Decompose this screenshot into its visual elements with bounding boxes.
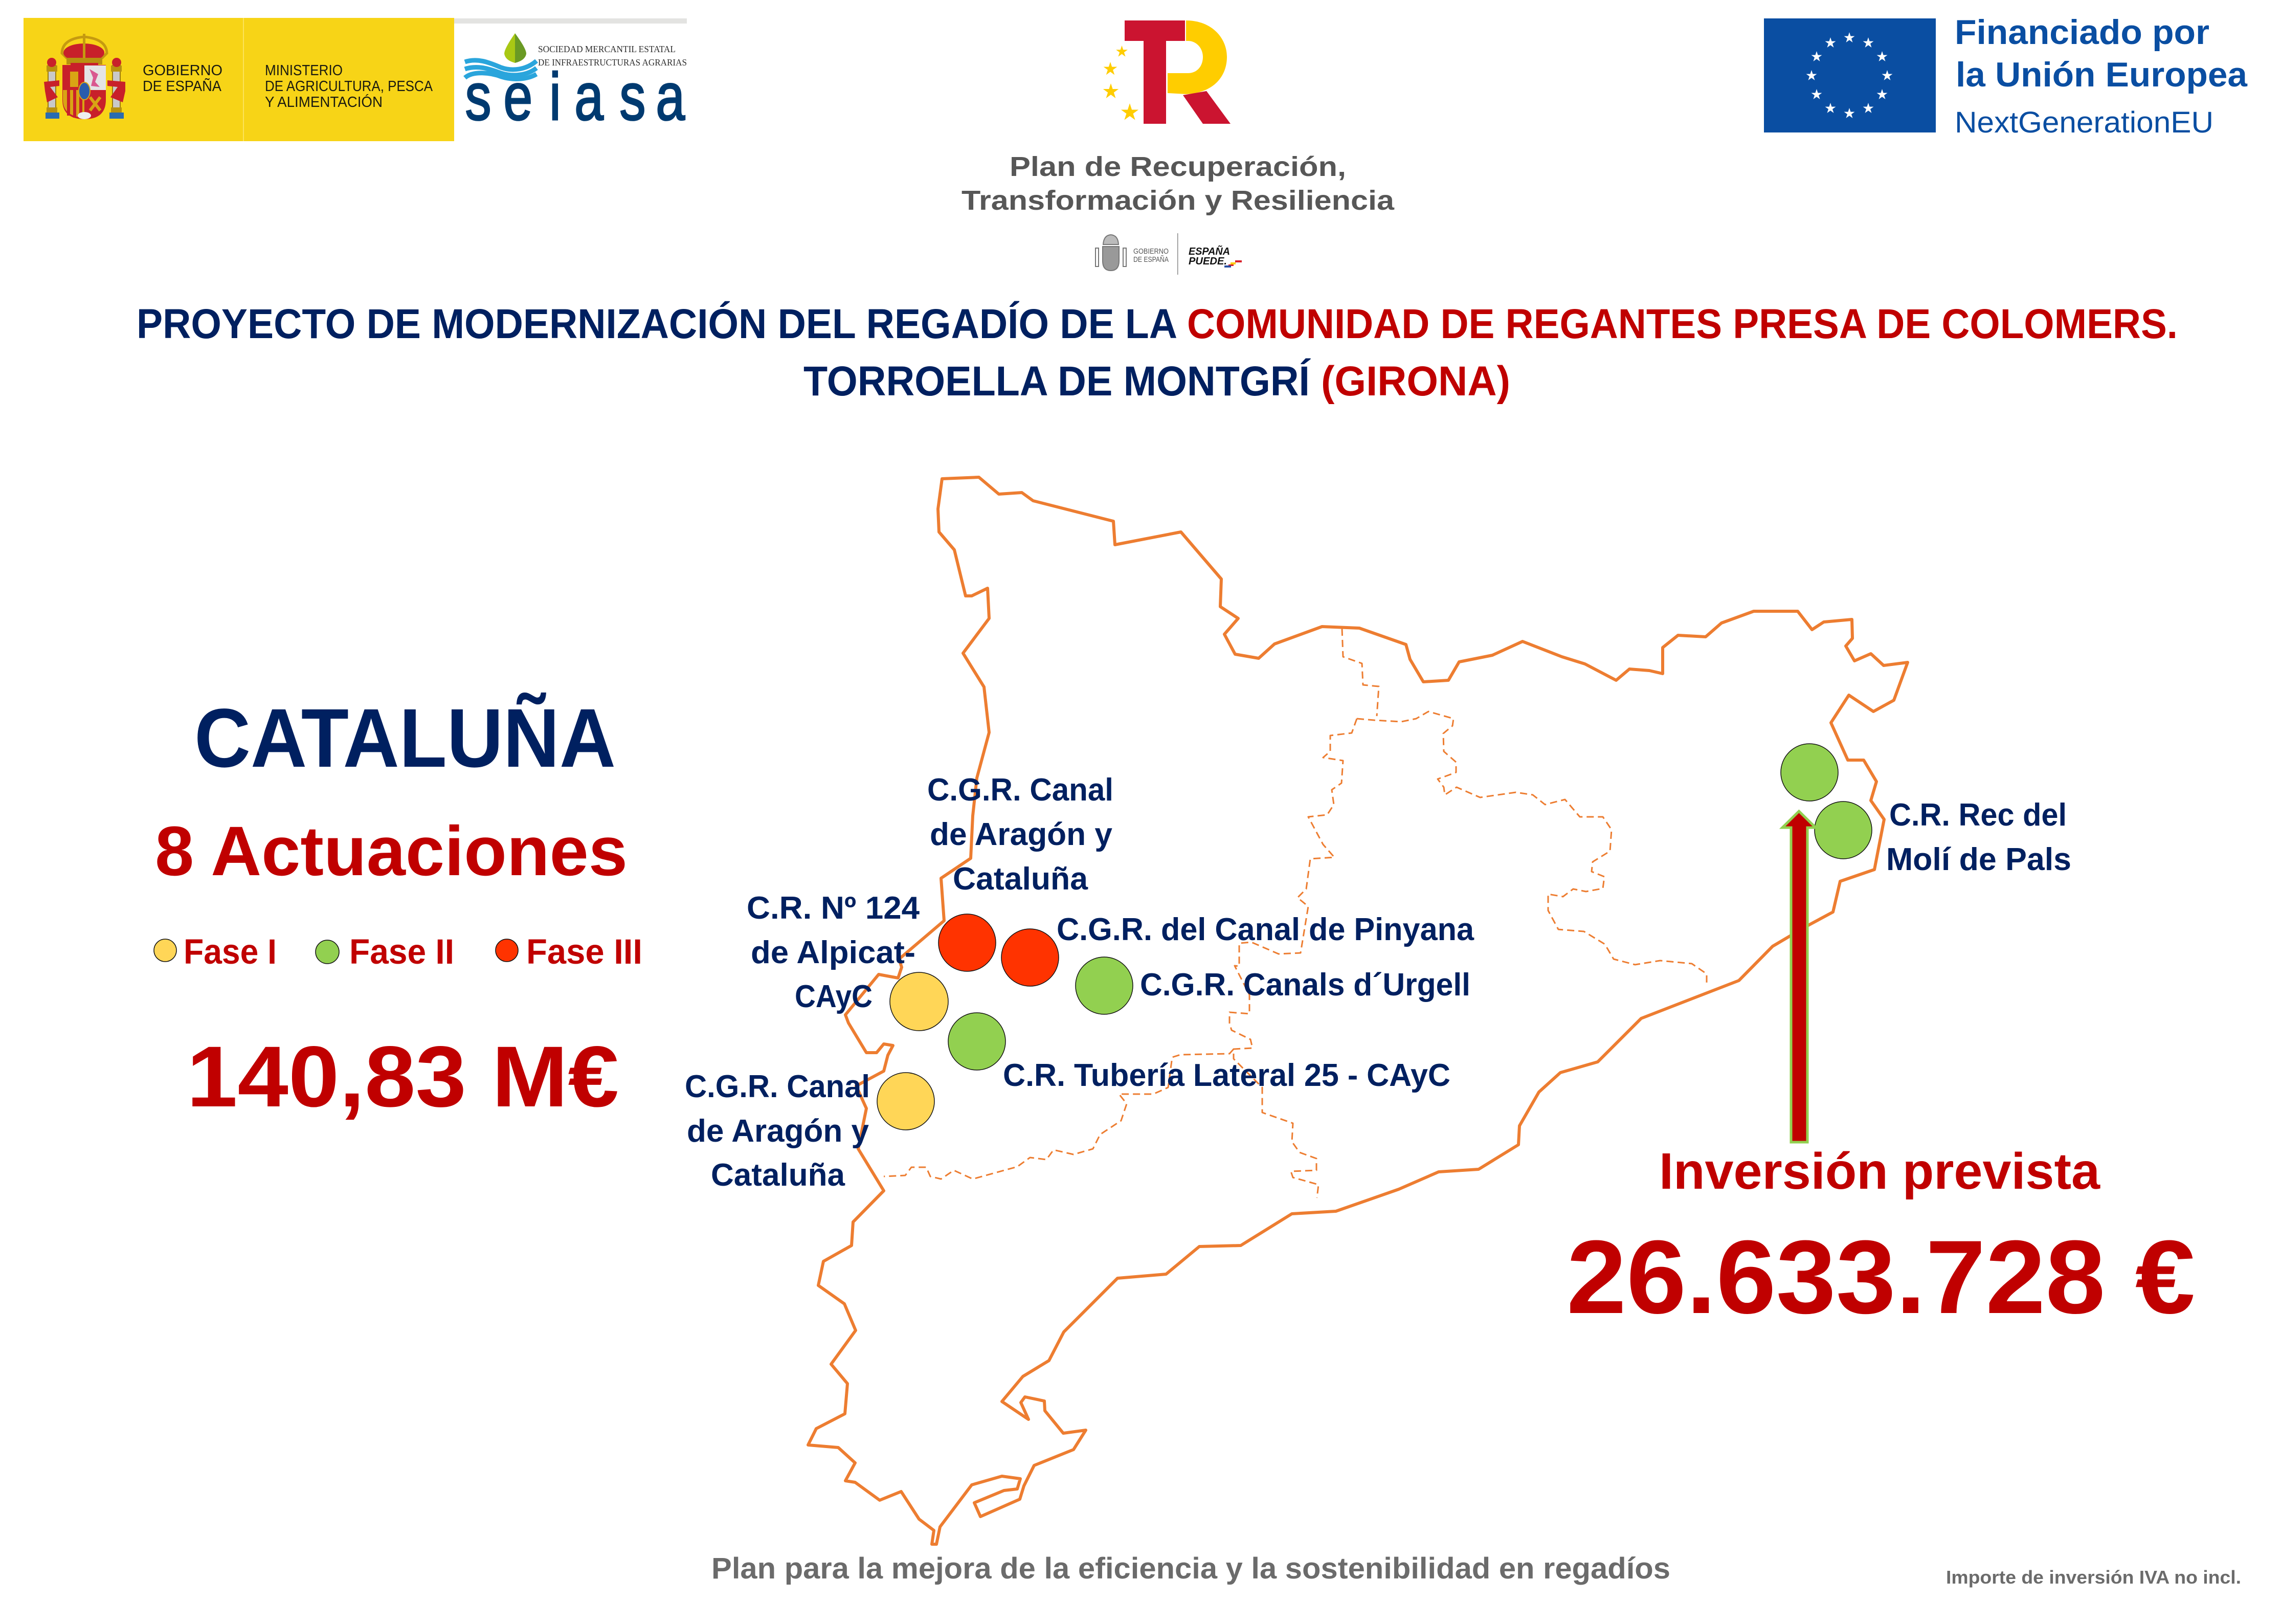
logo: Financiado por la Unión Europea [1764, 13, 2248, 139]
marker: C.G.R. Canals d'Urgell, fase II [1076, 957, 1133, 1014]
logo: Plan de Recuperación, Transformación y Resiliencia [961, 20, 1395, 275]
marker: project site north [1781, 744, 1838, 801]
title: (GIRONA) [1321, 358, 1510, 405]
legend: Fase I [184, 932, 277, 971]
label: C.G.R. Canal de Aragón y Cataluña (south): C.G.R. Canal [685, 1069, 870, 1104]
text: NextGenerationEU: NextGenerationEU [1955, 106, 2213, 139]
title: COMUNIDAD DE REGANTES PRESA DE COLOMERS. [1187, 301, 2178, 347]
label: C.R. Nº 124 de Alpicat-CAyC [747, 891, 920, 1014]
icon: coat of arms of Spain [44, 34, 125, 119]
text: Sociedad Mercantil Estatal de Infraestructuras Agrarias: SOCIEDAD MERCANTIL ESTATAL [538, 44, 676, 54]
icon: water waves [465, 60, 536, 79]
text: España Puede: PUEDE. [1189, 256, 1227, 267]
label: C.R. Nº 124 de Alpicat-CAyC: CAyC [795, 979, 873, 1014]
title: TORROELLA DE MONTGRÍ [803, 358, 1311, 405]
text: small Gobierno de España [1133, 247, 1169, 264]
text: Ministerio de Agricultura, Pesca y Alimentación [265, 62, 433, 110]
text: Financiado por: Financiado por [1955, 13, 2209, 52]
text: España Puede: ESPAÑA [1189, 246, 1230, 257]
title [137, 301, 2178, 405]
label: C.G.R. Canal de Aragón y Cataluña (north): C.G.R. Canal [927, 772, 1113, 808]
heading: Cataluña: CATALUÑA [194, 691, 616, 785]
label: C.R. Nº 124 de Alpicat-CAyC: de Alpicat- [751, 935, 915, 970]
left panel: summary [154, 691, 642, 1125]
text: 8 Actuaciones: 8 Actuaciones [155, 812, 628, 891]
text: small Gobierno de España: GOBIERNO [1133, 247, 1169, 256]
callout: planned investment [1567, 1143, 2195, 1336]
region outline [808, 477, 1908, 1544]
logo: SEIASA [454, 18, 687, 134]
label: C.R. Rec del Molí de Pals: Molí de Pals [1886, 842, 2071, 877]
text: Ministerio de Agricultura, Pesca y Alimentación: DE AGRICULTURA, PESCA [265, 78, 433, 95]
label: C.G.R. Canal de Aragón y Cataluña (north): de Aragón y [930, 817, 1113, 852]
label: C.G.R. Canal de Aragón y Cataluña (north) [927, 772, 1113, 897]
label: C.G.R. Canal de Aragón y Cataluña (south): Cataluña [711, 1158, 845, 1193]
marker: C.G.R. Canal de Aragón y Cataluña, fase III [938, 914, 996, 971]
logo: Gobierno de España, Ministerio [24, 18, 454, 141]
label: C.R. Nº 124 de Alpicat-CAyC: C.R. Nº 124 [747, 891, 920, 926]
marker: C.R. Nº 124 de Alpicat, fase I [890, 972, 948, 1031]
arrow [1782, 811, 1816, 1142]
icon: EU flag [1764, 18, 1936, 132]
label: C.G.R. Canal de Aragón y Cataluña (north): Cataluña [953, 861, 1088, 897]
title: PROYECTO DE MODERNIZACIÓN DEL REGADÍO DE LA [137, 301, 1177, 347]
legend: Fase II [349, 932, 454, 971]
marker: C.R. Rec del Molí de Pals, fase II [1815, 802, 1872, 859]
text: Ministerio de Agricultura, Pesca y Alimentación: Y ALIMENTACIÓN [265, 94, 383, 110]
map of Cataluña [808, 477, 1908, 1544]
text: Ministerio de Agricultura, Pesca y Alimentación: MINISTERIO [265, 62, 343, 79]
marker: C.G.R. del Canal de Pinyana, fase III [1001, 929, 1059, 986]
text: Inversión prevista: Inversión prevista [1659, 1143, 2100, 1200]
text: investment amount: 26.633.728 € [1567, 1219, 2195, 1336]
map markers [877, 744, 1872, 1130]
legend: Fase III [526, 932, 642, 971]
text: seiasa wordmark: seiasa [465, 59, 685, 134]
text: Gobierno de España [143, 62, 222, 95]
text: España Puede [1189, 246, 1230, 267]
text: small Gobierno de España: DE ESPAÑA [1133, 255, 1169, 264]
label: C.R. Tubería Lateral 25 - CAyC: C.R. Tubería Lateral 25 - CAyC [1003, 1058, 1450, 1093]
icon: small grey coat of arms [1095, 235, 1126, 271]
label: C.G.R. del Canal de Pinyana: C.G.R. del Canal de Pinyana [1057, 912, 1474, 947]
total amount: 140,83 M€ [187, 1028, 619, 1125]
label: C.R. Rec del Molí de Pals: C.R. Rec del [1889, 797, 2067, 833]
text: Transformación y Resiliencia: Transformación y Resiliencia [961, 185, 1395, 216]
map labels [685, 772, 2071, 1193]
text: Sociedad Mercantil Estatal de Infraestructuras Agrarias: DE INFRAESTRUCTURAS AGRARIAS [538, 57, 687, 68]
marker: C.R. Tubería Lateral 25, fase II [948, 1013, 1005, 1070]
icon: mini stairs [1224, 260, 1242, 268]
label: C.G.R. Canal de Aragón y Cataluña (south) [685, 1069, 870, 1193]
text: Gobierno de España: DE ESPAÑA [143, 77, 222, 95]
legend [154, 932, 642, 971]
label: C.R. Rec del Molí de Pals [1886, 797, 2071, 877]
text: Plan de Recuperación: Plan de Recuperación, [1010, 151, 1346, 182]
text: Sociedad Mercantil Estatal de Infraestructuras Agrarias [538, 44, 687, 68]
label: C.G.R. Canals d'Urgell: C.G.R. Canals d´Urgell [1140, 967, 1470, 1003]
marker: C.G.R. Canal de Aragón y Cataluña, fase I [877, 1073, 934, 1130]
icon: leaf [504, 33, 526, 63]
text: Gobierno de España: GOBIERNO [143, 62, 222, 79]
icon: TR emblem [1103, 20, 1231, 124]
footer text: Plan para la mejora de la eficiencia y la sostenibilidad en regadíos [711, 1552, 1670, 1585]
text: la Unión Europea: la Unión Europea [1956, 55, 2248, 94]
province borders [884, 629, 1707, 1198]
footnote: Importe de inversión IVA no incl. [1946, 1567, 2241, 1588]
label: C.G.R. Canal de Aragón y Cataluña (south): de Aragón y [687, 1114, 869, 1149]
